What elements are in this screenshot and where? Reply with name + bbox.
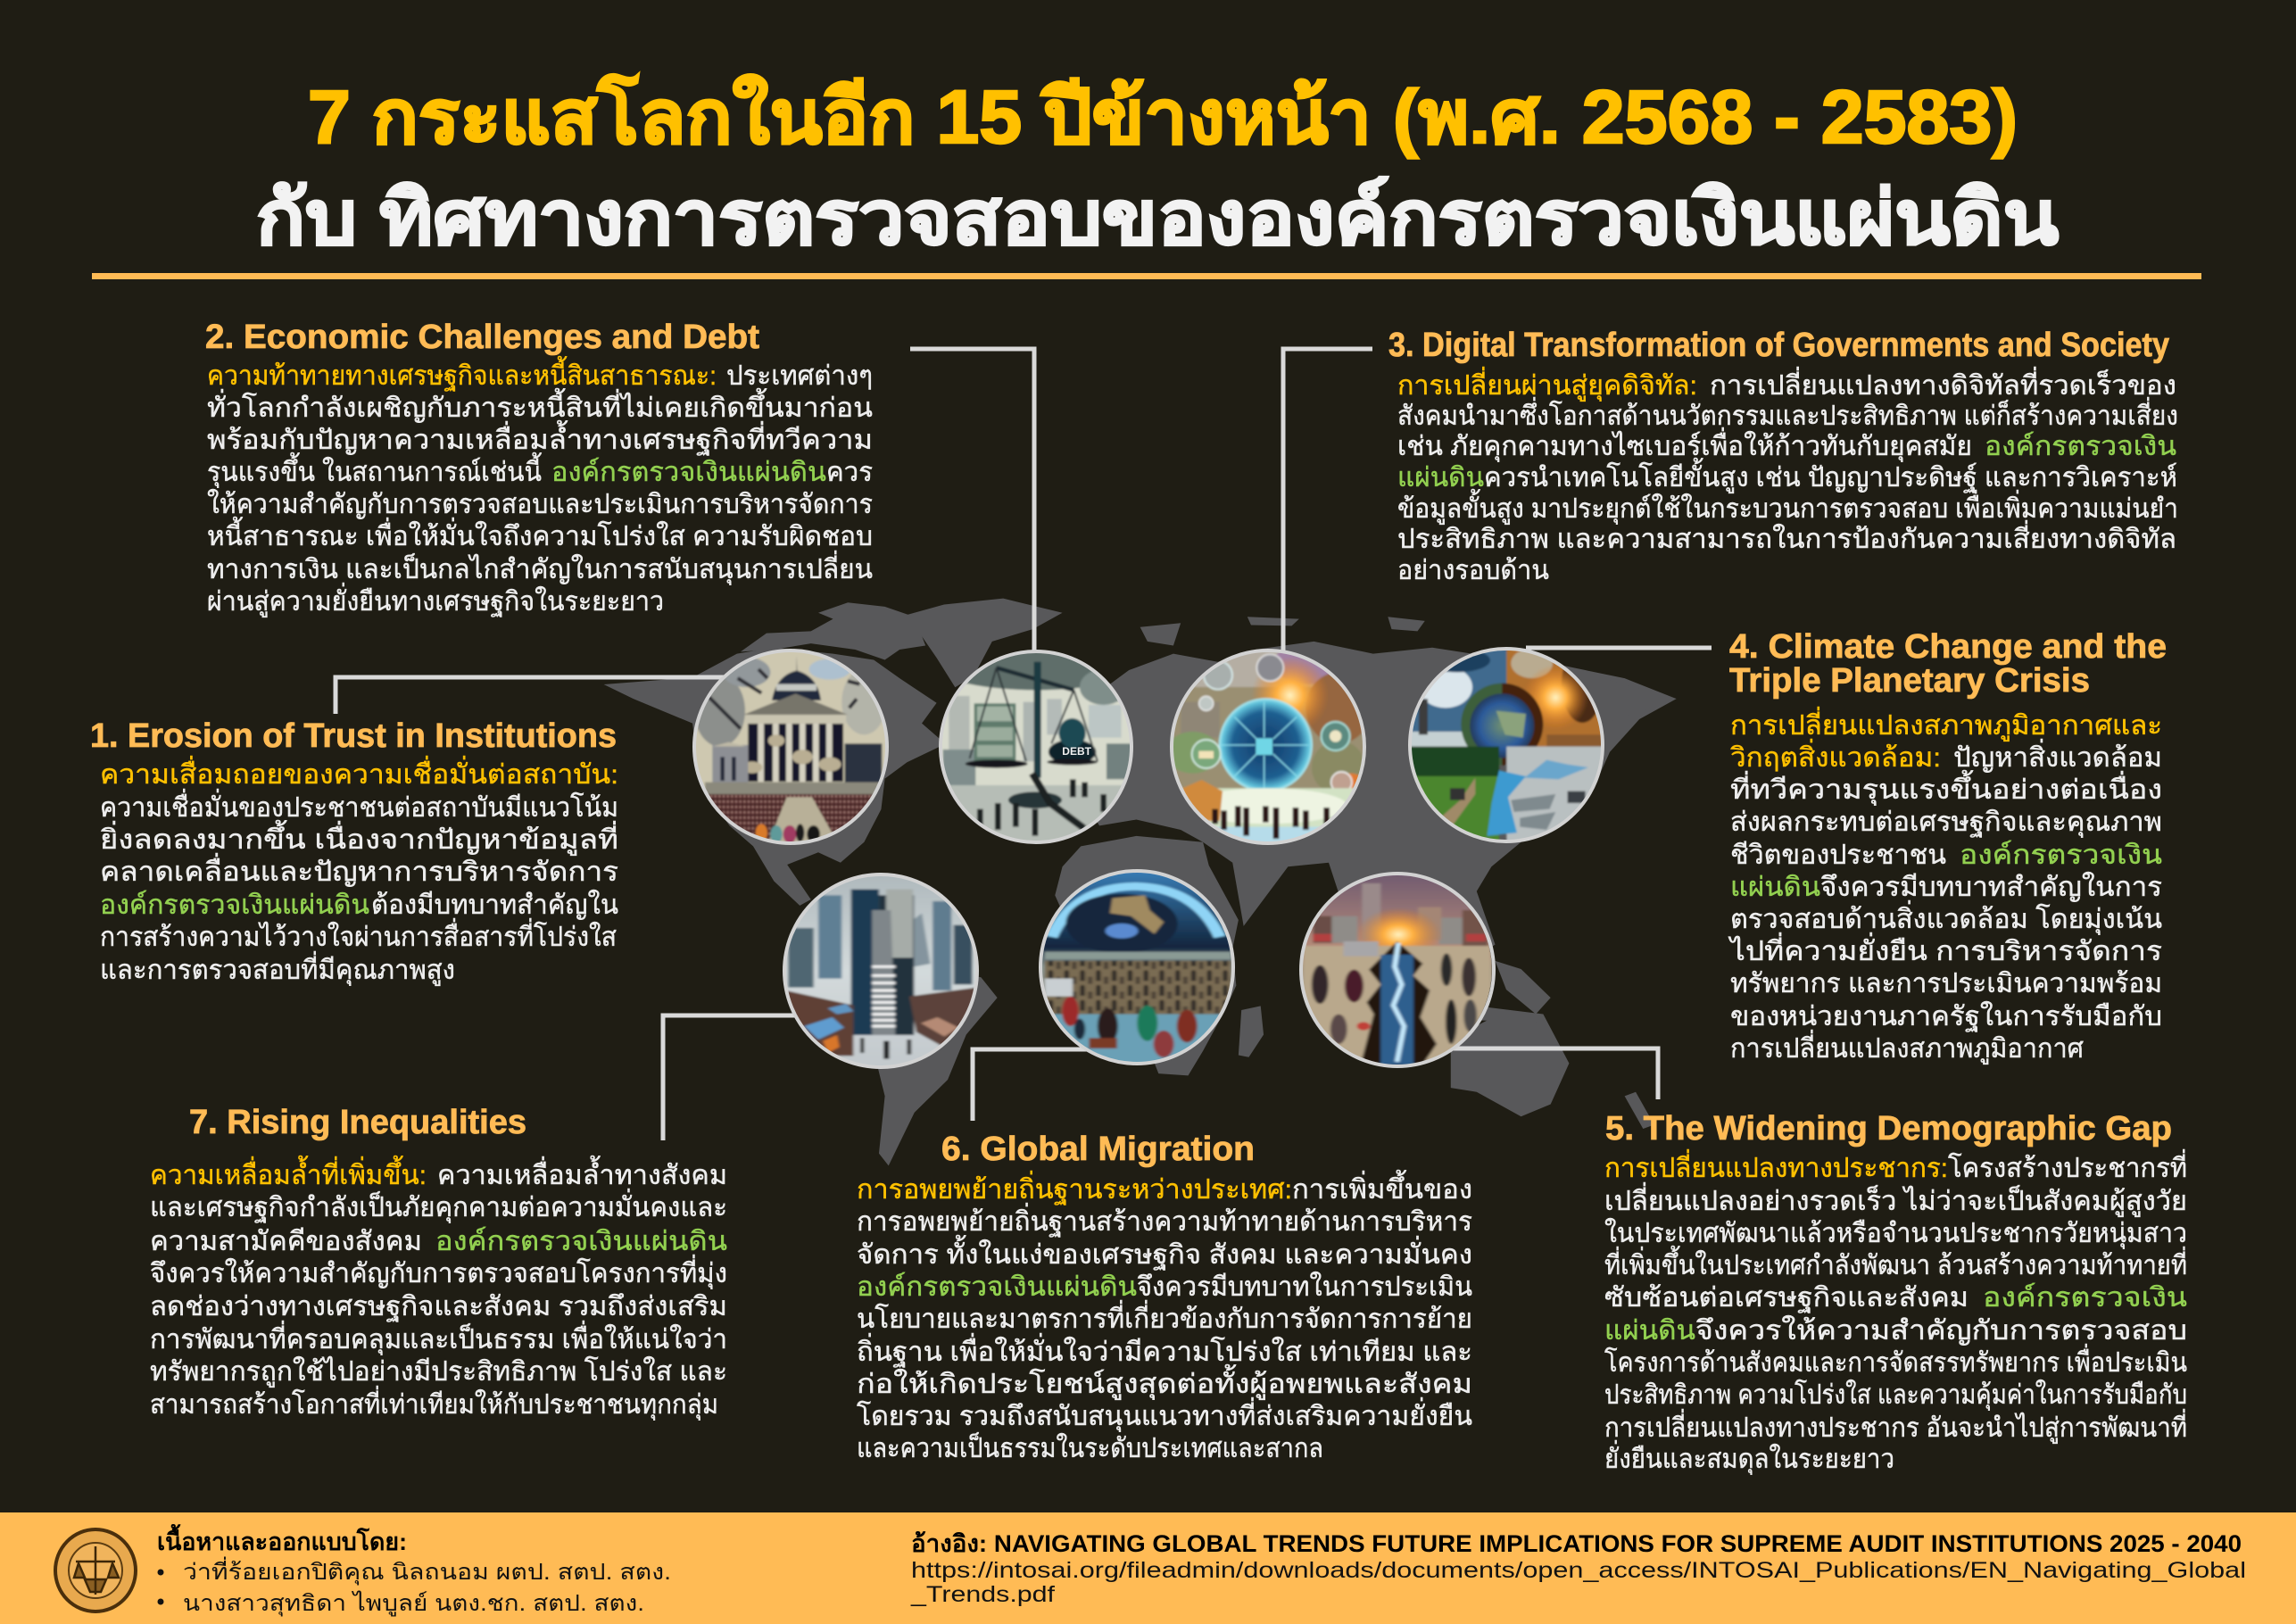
body 1: การสร้างความไว้วางใจผ่านการสื่อสารที่โปร่งใส [100, 918, 617, 952]
body 2: ทางการเงิน และเป็นกลไกสำคัญในการสนับสนุนการเปลี่ยน [207, 551, 873, 586]
body 7: จึงควรให้ความสำคัญกับการตรวจสอบโครงการที่มุ่ง [150, 1255, 727, 1290]
heading 2: 2. Economic Challenges and Debt [205, 319, 759, 356]
body 2: ความท้าทายทางเศรษฐกิจและหนี้สินสาธารณะ: [207, 356, 717, 392]
body 2: รุนแรงขึ้น ในสถานการณ์เช่นนี้ [207, 452, 542, 489]
body 7: ทรัพยากรถูกใช้ไปอย่างมีประสิทธิภาพ โปร่งใส และ [150, 1355, 727, 1388]
body 2: ทั่วโลกกำลังเผชิญกับภาระหนี้สินที่ไม่เคยเกิดขึ้นมาก่อน [207, 388, 873, 423]
body 5: แผ่นดิน [1604, 1316, 1695, 1346]
body 4: ไปที่ความยั่งยืน การบริหารจัดการ [1728, 932, 2162, 966]
body 3: อย่างรอบด้าน [1397, 556, 1549, 585]
reference: อ้างอิง: NAVIGATING GLOBAL TRENDS FUTURE IMPLICATIONS FOR SUPREME AUDIT INSTITUTIONS 2025 - 2040 [911, 1530, 2242, 1557]
body 6: นโยบายและมาตรการที่เกี่ยวข้องกับการจัดการการย้าย [857, 1300, 1472, 1334]
world map [604, 599, 1677, 1165]
body 5: ที่เพิ่มขึ้นในประเทศกำลังพัฒนา ล้วนสร้างความท้าทายที่ [1604, 1246, 2187, 1280]
body 5: เปลี่ยนแปลงอย่างรวดเร็ว ไม่ว่าจะเป็นสังคมผู้สูงวัย [1604, 1182, 2187, 1217]
body 5: ยั่งยืนและสมดุลในระยะยาว [1604, 1440, 1894, 1476]
body 1: ความเสื่อมถอยของความเชื่อมั่นต่อสถาบัน: [100, 756, 618, 790]
body 5: การเปลี่ยนแปลงทางประชากร อันจะนำไปสู่การพัฒนาที่ [1604, 1409, 2187, 1444]
body 6: และความเป็นธรรมในระดับประเทศและสากล [857, 1431, 1323, 1463]
heading 7: 7. Rising Inequalities [189, 1104, 526, 1141]
image: climate change globe [1410, 645, 1604, 848]
body 6 [857, 1170, 1472, 1463]
body 7: การพัฒนาที่ครอบคลุมและเป็นธรรม เพื่อให้แน่ใจว่า [150, 1321, 727, 1356]
credits: นางสาวสุทธิดา ไพบูลย์ นตง.ชก. สตป. สตง. [183, 1590, 644, 1617]
body 1: ความเชื่อมั่นของประชาชนต่อสถาบันมีแนวโน้ม [100, 789, 618, 823]
body 1: ยิ่งลดลงมากขึ้น เนื่องจากปัญหาข้อมูลที่ [100, 820, 618, 856]
heading 4: 4. Climate Change and the [1729, 628, 2167, 666]
body 2: ควร [826, 458, 873, 487]
heading 4: Triple Planetary Crisis [1729, 662, 2090, 700]
image: scales with debt weight [939, 650, 1133, 844]
connector lines [336, 349, 1712, 1140]
reference: https://intosai.org/fileadmin/downloads/documents/open_access/INTOSAI_Publications/EN_Navigating_Global [911, 1558, 2246, 1583]
body 7: ความเหลื่อมล้ำที่เพิ่มขึ้น: [150, 1156, 427, 1190]
body 2: พร้อมกับปัญหาความเหลื่อมล้ำทางเศรษฐกิจที่ทวีความ [207, 420, 873, 456]
body 6: โดยรวม รวมถึงสนับสนุนแนวทางที่ส่งเสริมความยั่งยืน [857, 1397, 1472, 1433]
body 1: คลาดเคลื่อนและปัญหาการบริหารจัดการ [100, 853, 618, 887]
image: scales with debt weight: DEBT [1062, 745, 1092, 758]
body 7 [150, 1156, 727, 1421]
body 3 [1397, 367, 2178, 585]
panel: 1 erosion of trust [90, 717, 618, 987]
body 4: จึงควรมีบทบาทสำคัญในการ [1820, 872, 2162, 902]
image: demographic gap cracked road [1299, 872, 1495, 1068]
heading 5: 5. The Widening Demographic Gap [1605, 1110, 2172, 1148]
body 4: การเปลี่ยนแปลงสภาพภูมิอากาศ [1730, 1030, 2084, 1065]
body 4: ที่ทวีความรุนแรงขึ้นอย่างต่อเนื่อง [1730, 770, 2162, 807]
body 3: ควรนำเทคโนโลยีขั้นสูง เช่น ปัญญาประดิษฐ์ และการวิเคราะห์ [1484, 458, 2177, 493]
image: towers and slums inequality [781, 872, 982, 1071]
body 7: องค์กรตรวจเงินแผ่นดิน [435, 1226, 727, 1256]
credits: ว่าที่ร้อยเอกปิติคุณ นิลถนอม ผตป. สตป. สตง. [183, 1556, 671, 1586]
body 4: ปัญหาสิ่งแวดล้อม [1953, 739, 2162, 773]
body 3: ประสิทธิภาพ และความสามารถในการป้องกันความเสี่ยงทางดิจิทัล [1397, 520, 2176, 554]
body 3: องค์กรตรวจเงิน [1985, 431, 2176, 461]
body 6: ถิ่นฐาน เพื่อให้มั่นใจว่ามีความโปร่งใส เท่าเทียม และ [857, 1333, 1472, 1368]
icon: audit office seal [55, 1529, 136, 1612]
reference [910, 1530, 2246, 1607]
image: crumbling institution building [692, 649, 889, 845]
body 3: แผ่นดิน [1397, 463, 1484, 493]
body 6: ก่อให้เกิดประโยชน์สูงสุดต่อทั้งผู้อพยพและสังคม [857, 1364, 1472, 1401]
body 3: เช่น ภัยคุกคามทางไซเบอร์เพื่อให้ก้าวทันกับยุคสมัย [1397, 427, 1972, 463]
title: 7 กระแสโลกในอีก 15 ปีข้างหน้า (พ.ศ. 2568 - 2583) [308, 74, 2018, 159]
body 5: การเปลี่ยนแปลงทางประชากร: [1604, 1149, 1948, 1183]
credits: เนื้อหาและออกแบบโดย: [157, 1523, 407, 1555]
body 2: หนี้สาธารณะ เพื่อให้มั่นใจถึงความโปร่งใส ความรับผิดชอบ [207, 517, 873, 551]
body 5: จึงควรให้ความสำคัญกับการตรวจสอบ [1695, 1315, 2187, 1346]
reference: _Trends.pdf [910, 1582, 1055, 1607]
panel: 5 demographic gap [1604, 1110, 2187, 1476]
title [256, 74, 2059, 260]
body 3: การเปลี่ยนแปลงทางดิจิทัลที่รวดเร็วของ [1710, 367, 2176, 401]
body 7: ความเหลื่อมล้ำทางสังคม [437, 1156, 727, 1190]
body 7: สามารถสร้างโอกาสที่เท่าเทียมให้กับประชาชนทุกกลุ่ม [150, 1386, 718, 1421]
body 6: การอพยพย้ายถิ่นฐานสร้างความท้าทายด้านการบริหาร [857, 1203, 1472, 1238]
body 4 [1728, 707, 2162, 1065]
body 5: องค์กรตรวจเงิน [1983, 1282, 2187, 1313]
footer band [0, 1512, 2296, 1624]
heading 6: 6. Global Migration [941, 1131, 1255, 1168]
body 1 [100, 756, 618, 987]
panel: 4 climate change [1728, 628, 2167, 1065]
panel: 6 global migration [857, 1131, 1472, 1463]
body 5: ประสิทธิภาพ ความโปร่งใส และความคุ้มค่าในการรับมือกับ [1604, 1379, 2187, 1412]
image: digital transformation brain chip [1166, 642, 1372, 850]
body 3: ข้อมูลขั้นสูง มาประยุกต์ใช้ในกระบวนการตรวจสอบ เพื่อเพิ่มความแม่นยำ [1397, 489, 2178, 526]
title underline [92, 273, 2201, 279]
body 1: องค์กรตรวจเงินแผ่นดิน [100, 890, 369, 920]
heading 3: 3. Digital Transformation of Governments and Society [1388, 327, 2169, 364]
credits [157, 1523, 671, 1617]
image: global migration crowd [1038, 868, 1239, 1068]
body 6: การอพยพย้ายถิ่นฐานระหว่างประเทศ: [857, 1171, 1292, 1206]
body 2: ผ่านสู่ความยั่งยืนทางเศรษฐกิจในระยะยาว [207, 583, 664, 617]
body 4: วิกฤตสิ่งแวดล้อม: [1730, 739, 1941, 773]
body 5: โครงการด้านสังคมและการจัดสรรทรัพยากร เพื่อประเมิน [1604, 1344, 2187, 1378]
body 1: และการตรวจสอบที่มีคุณภาพสูง [100, 951, 455, 987]
body 7: และเศรษฐกิจกำลังเป็นภัยคุกคามต่อความมั่นคงและ [150, 1189, 727, 1224]
panel: 3 digital transformation [1388, 327, 2178, 585]
body 5: ซับซ้อนต่อเศรษฐกิจและสังคม [1604, 1283, 1969, 1313]
body 6: องค์กรตรวจเงินแผ่นดิน [857, 1272, 1137, 1302]
body 6: การเพิ่มขึ้นของ [1292, 1170, 1472, 1205]
body 4: ตรวจสอบด้านสิ่งแวดล้อม โดยมุ่งเน้น [1730, 900, 2162, 936]
panel: 2 economic challenges [205, 319, 873, 617]
body 2 [207, 356, 873, 617]
panel: 7 rising inequalities [150, 1104, 727, 1421]
heading 4 [1729, 628, 2167, 700]
body 7: ลดช่องว่างทางเศรษฐกิจและสังคม รวมถึงส่งเสริม [150, 1292, 727, 1322]
body 2: ให้ความสำคัญกับการตรวจสอบและประเมินการบริหารจัดการ [207, 489, 873, 519]
body 3: การเปลี่ยนผ่านสู่ยุคดิจิทัล: [1397, 367, 1697, 402]
body 5 [1604, 1149, 2187, 1476]
body 4: ของหน่วยงานภาครัฐในการรับมือกับ [1730, 1001, 2162, 1032]
heading 1: 1. Erosion of Trust in Institutions [90, 717, 617, 755]
body 4: การเปลี่ยนแปลงสภาพภูมิอากาศและ [1730, 707, 2162, 742]
body 2: องค์กรตรวจเงินแผ่นดิน [551, 457, 826, 487]
title: กับ ทิศทางการตรวจสอบขององค์กรตรวจเงินแผ่นดิน [256, 176, 2059, 260]
body 4: องค์กรตรวจเงิน [1960, 840, 2162, 870]
body 4: แผ่นดิน [1730, 873, 1820, 902]
body 6: จึงควรมีบทบาทในการประเมิน [1137, 1272, 1472, 1302]
body 7: ความสามัคคีของสังคม [150, 1227, 422, 1256]
body 2: ประเทศต่างๆ [726, 361, 873, 391]
body 5: ในประเทศพัฒนาแล้วหรือจำนวนประชากรวัยหนุ่มสาว [1604, 1218, 2187, 1250]
body 5: โครงสร้างประชากรที่ [1948, 1149, 2187, 1183]
body 6: จัดการ ทั้งในแง่ของเศรษฐกิจ สังคม และความมั่นคง [857, 1235, 1472, 1271]
body 4: ทรัพยากร และการประเมินความพร้อม [1730, 969, 2162, 998]
body 4: ชีวิตของประชาชน [1730, 841, 1946, 870]
body 4: ส่งผลกระทบต่อเศรษฐกิจและคุณภาพ [1730, 808, 2162, 839]
body 1: ต้องมีบทบาทสำคัญใน [371, 890, 618, 920]
body 3: สังคมนำมาซึ่งโอกาสด้านนวัตกรรมและประสิทธิภาพ แต่ก็สร้างความเสี่ยง [1397, 397, 2178, 431]
